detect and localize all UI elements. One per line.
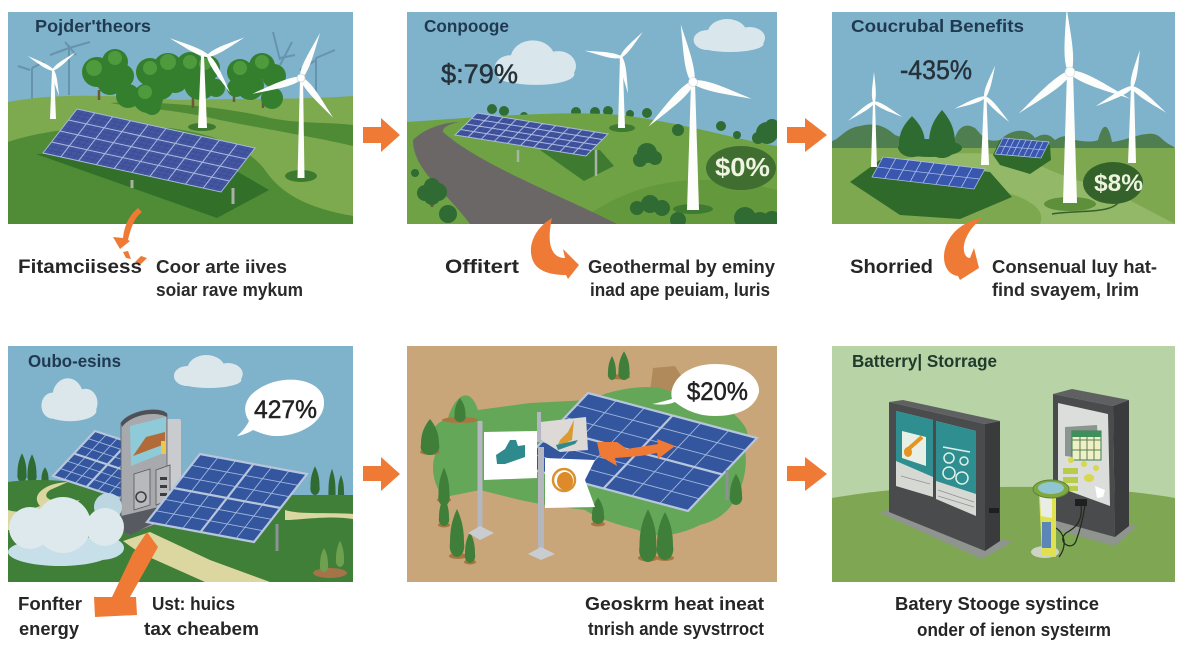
trees cluster [82,49,286,115]
wind turbines [847,8,1168,203]
flag 3 [545,458,595,508]
text block: Fonfter energy [18,593,82,639]
text block 3: find svayem, lrim [992,280,1139,300]
text block 4: Ust: huics [152,593,235,614]
text block 3 [992,257,1157,300]
shrubs [411,119,781,232]
text block 1 [156,257,303,300]
panel 1 title: Pojder'theors [35,16,151,36]
stat: $0%: $0% [715,152,770,182]
left solar panel [51,430,121,500]
stat: $:79%: $:79% [441,59,518,89]
text block 6: Batery Stooge systince [895,593,1099,614]
text block 5: tnrish ande syvstrroct [588,618,764,639]
curved arrow 2 [531,218,579,279]
solar panel [455,113,608,156]
speech bubble: $20%: $20% [687,378,748,406]
clouds [41,355,243,421]
text block: Fonfter energy: energy [19,618,80,639]
solar panel [43,109,255,192]
label: Shorried: Shorried [850,256,933,278]
panel: solar kiosk scene [8,346,353,582]
label: Fitamciisess: Fitamciisess [18,256,142,278]
text block 4: tax cheabem [144,618,259,639]
badge: $0% [706,146,776,190]
panel: map with flags scene [407,346,777,582]
flag 2 [540,417,588,452]
arrow: row 1 left [363,118,400,152]
solar panels [872,138,1049,189]
foreground clouds [8,493,124,566]
pole [528,412,555,560]
curved arrow 1 [113,208,147,264]
stat: 35%: -435% [900,55,972,85]
text block 6 [895,593,1111,640]
text block 6: onder of ienon systeırm [917,619,1111,640]
text block 3: Consenual luy hat- [992,257,1157,277]
arrow: row 1 right [787,118,827,152]
speech bubble: 427% [237,380,324,436]
panel 2 title: Conpooge [424,16,509,36]
text block 1: soiar rave mykum [156,280,303,300]
wind turbines [27,32,336,178]
green land [430,387,748,535]
badge: $8% [1052,162,1143,214]
stat: $8%: $8% [1094,170,1143,197]
orange arrow [597,439,675,466]
tree mounds [420,374,674,564]
arrow: row 2 right [787,457,827,491]
wind turbines [584,24,753,210]
panel 3 title: Coucrubal Benefits [851,16,1024,36]
speech bubble: $20% [652,364,759,416]
arrow: row 2 left [363,457,400,491]
arrow: to Fonfter energy [94,532,158,617]
panel: conceptual benefits scene [832,8,1175,224]
curved arrow 3 [944,218,982,280]
text block 1: Coor arte iives [156,257,287,277]
text block 2: inad ape peuiam, luris [590,280,770,300]
text block 4 [144,593,259,639]
flag 1 with pole [468,421,537,540]
left storage unit [880,400,1012,559]
text block 5 [585,593,764,639]
kiosk [121,410,181,535]
panel 6 title: Batterry| Storrage [852,351,997,371]
text block 5: Geoskrm heat ineat [585,593,764,614]
text block: Fonfter energy: Fonfter [18,593,82,614]
label: Offitert: Offitert [445,256,520,278]
solar panel [519,393,757,511]
panel: battery storage scene [832,346,1175,582]
clouds [494,19,765,85]
speech bubble: 427%: 427% [254,396,317,424]
right solar panel [147,454,307,542]
panel 4 title: Oubo-esins [28,351,121,371]
panel: component scene [407,12,781,232]
text block 2 [588,257,775,300]
panel: power theory scene [8,12,353,224]
right storage unit [1053,389,1137,546]
charging station [1031,480,1085,558]
text block 2: Geothermal by eminy [588,257,775,277]
sprouts [313,541,347,578]
